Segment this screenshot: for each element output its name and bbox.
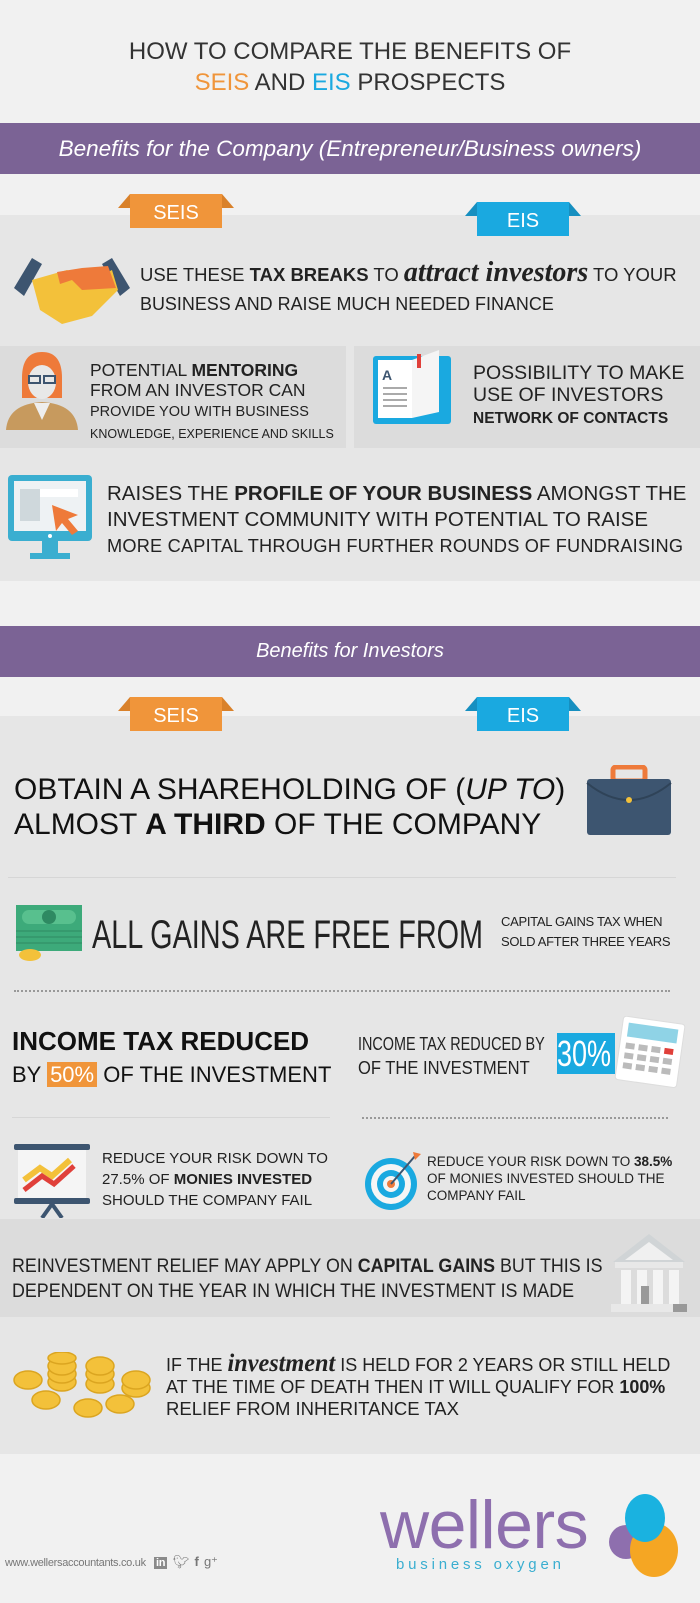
footer: url and social icons: www.wellersaccountants.co.uk in 🐦︎ f g⁺ (5, 1554, 218, 1569)
title: SEIS AND EIS PROSPECTS (195, 69, 505, 96)
text: inheritance tax (166, 1350, 670, 1419)
text: mentoring: PROVIDE YOU WITH BUSINESS (90, 404, 309, 420)
text: income tax 50%: INCOME TAX REDUCED (12, 1026, 309, 1056)
title (129, 38, 571, 96)
text: profile: MORE CAPITAL THROUGH FURTHER ROUNDS OF FUNDRAISING (107, 536, 683, 556)
text: income tax 50% (12, 1026, 331, 1087)
text: inheritance tax: IF THE investment IS HELD FOR 2 YEARS OR STILL HELD (166, 1350, 670, 1377)
text: attract investors: BUSINESS AND RAISE MUCH NEEDED FINANCE (140, 293, 554, 314)
tagline: business oxygen (396, 1556, 565, 1573)
text: income tax 30%: INCOME TAX REDUCED BY (358, 1034, 545, 1054)
text: mentoring (90, 360, 334, 441)
text: income tax 50%: BY 50% OF THE INVESTMENT (12, 1062, 331, 1087)
text: risk 38.5%: REDUCE YOUR RISK DOWN TO 38.5% (427, 1154, 672, 1169)
text: risk 27.5%: SHOULD THE COMPANY FAIL (102, 1192, 312, 1209)
text: network: USE OF INVESTORS (473, 384, 663, 406)
text: reinvestment (12, 1256, 603, 1302)
icon: mentor person (6, 352, 78, 430)
text: risk 27.5% (102, 1150, 328, 1209)
icon: coins (13, 1352, 151, 1418)
title: HOW TO COMPARE THE BENEFITS OF (129, 38, 571, 65)
text: risk 38.5%: COMPANY FAIL (427, 1188, 526, 1203)
text: income tax 30% (358, 1034, 545, 1078)
heading band: investors (0, 626, 700, 677)
box: 30%: 30% (557, 1033, 611, 1074)
wordmark: wellers (380, 1487, 588, 1563)
text: income tax 30%: OF THE INVESTMENT (358, 1058, 530, 1078)
heading band: company (0, 123, 700, 174)
panel: investors background (0, 716, 700, 1454)
text: capital gains: CAPITAL GAINS TAX WHEN (501, 914, 662, 929)
text: network: NETWORK OF CONTACTS (473, 410, 668, 427)
icon: bank (611, 1234, 687, 1312)
text: risk 38.5%: OF MONIES INVESTED SHOULD THE (427, 1171, 665, 1186)
text: network: POSSIBILITY TO MAKE (473, 362, 684, 384)
text: capital gains: SOLD AFTER THREE YEARS (501, 934, 670, 949)
text: risk 38.5% (427, 1154, 672, 1203)
text: attract investors (140, 257, 677, 314)
text: attract investors: USE THESE TAX BREAKS TO attract investors TO YOUR (140, 257, 677, 288)
text: reinvestment: REINVESTMENT RELIEF MAY APPLY ON CAPITAL GAINS BUT THIS IS (12, 1256, 603, 1277)
icon: target (365, 1152, 421, 1210)
tag: SEIS investors: SEIS (153, 705, 199, 727)
text: mentoring: KNOWLEDGE, EXPERIENCE AND SKILLS (90, 427, 334, 441)
text: reinvestment: DEPENDENT ON THE YEAR IN WHICH THE INVESTMENT IS MADE (12, 1281, 574, 1302)
text: capital gains (501, 914, 670, 949)
panel: reinvestment relief (0, 1219, 700, 1317)
panel: mentoring (0, 346, 346, 448)
text: risk 27.5%: 27.5% OF MONIES INVESTED (102, 1171, 312, 1188)
text: all gains free: ALL GAINS ARE FREE FROM (92, 913, 483, 957)
tag: EIS company (465, 202, 581, 236)
text: profile: RAISES THE PROFILE OF YOUR BUSINESS AMONGST THE (107, 482, 686, 505)
panel: network (354, 346, 700, 448)
text: shareholding: OBTAIN A SHAREHOLDING OF (UP TO) (14, 773, 565, 806)
balloons (609, 1494, 678, 1577)
icon: monitor (8, 475, 92, 559)
text: inheritance tax: AT THE TIME OF DEATH THEN IT WILL QUALIFY FOR 100% (166, 1376, 665, 1397)
text: profile (107, 482, 686, 556)
tag: EIS investors (465, 697, 581, 731)
icon: briefcase (586, 765, 672, 835)
text: shareholding (14, 773, 565, 841)
heading band: company: Benefits for the Company (Entrepreneur/Business owners) (59, 136, 641, 161)
text: shareholding: ALMOST A THIRD OF THE COMPANY (14, 808, 541, 841)
icon: handshake (14, 258, 130, 324)
panel: company benefits background (0, 215, 700, 581)
text: risk 27.5%: REDUCE YOUR RISK DOWN TO (102, 1150, 328, 1167)
logo: wellers (380, 1487, 678, 1577)
tag: EIS investors: EIS (507, 705, 539, 727)
text: profile: INVESTMENT COMMUNITY WITH POTENTIAL TO RAISE (107, 508, 648, 531)
text: inheritance tax: RELIEF FROM INHERITANCE TAX (166, 1398, 459, 1419)
icon: book (373, 350, 451, 424)
icon: calculator (615, 1016, 685, 1088)
tag: EIS company: EIS (507, 210, 539, 232)
heading band: investors: Benefits for Investors (256, 640, 444, 662)
tag: SEIS company: SEIS (153, 202, 199, 224)
icon: book: A (382, 367, 392, 383)
text: mentoring: POTENTIAL MENTORING (90, 360, 298, 380)
tag: SEIS investors (118, 697, 234, 731)
text: network (473, 362, 684, 427)
icon: easel chart (14, 1144, 90, 1218)
tag: SEIS company (118, 194, 234, 228)
icon: money (16, 905, 82, 961)
text: mentoring: FROM AN INVESTOR CAN (90, 380, 306, 400)
